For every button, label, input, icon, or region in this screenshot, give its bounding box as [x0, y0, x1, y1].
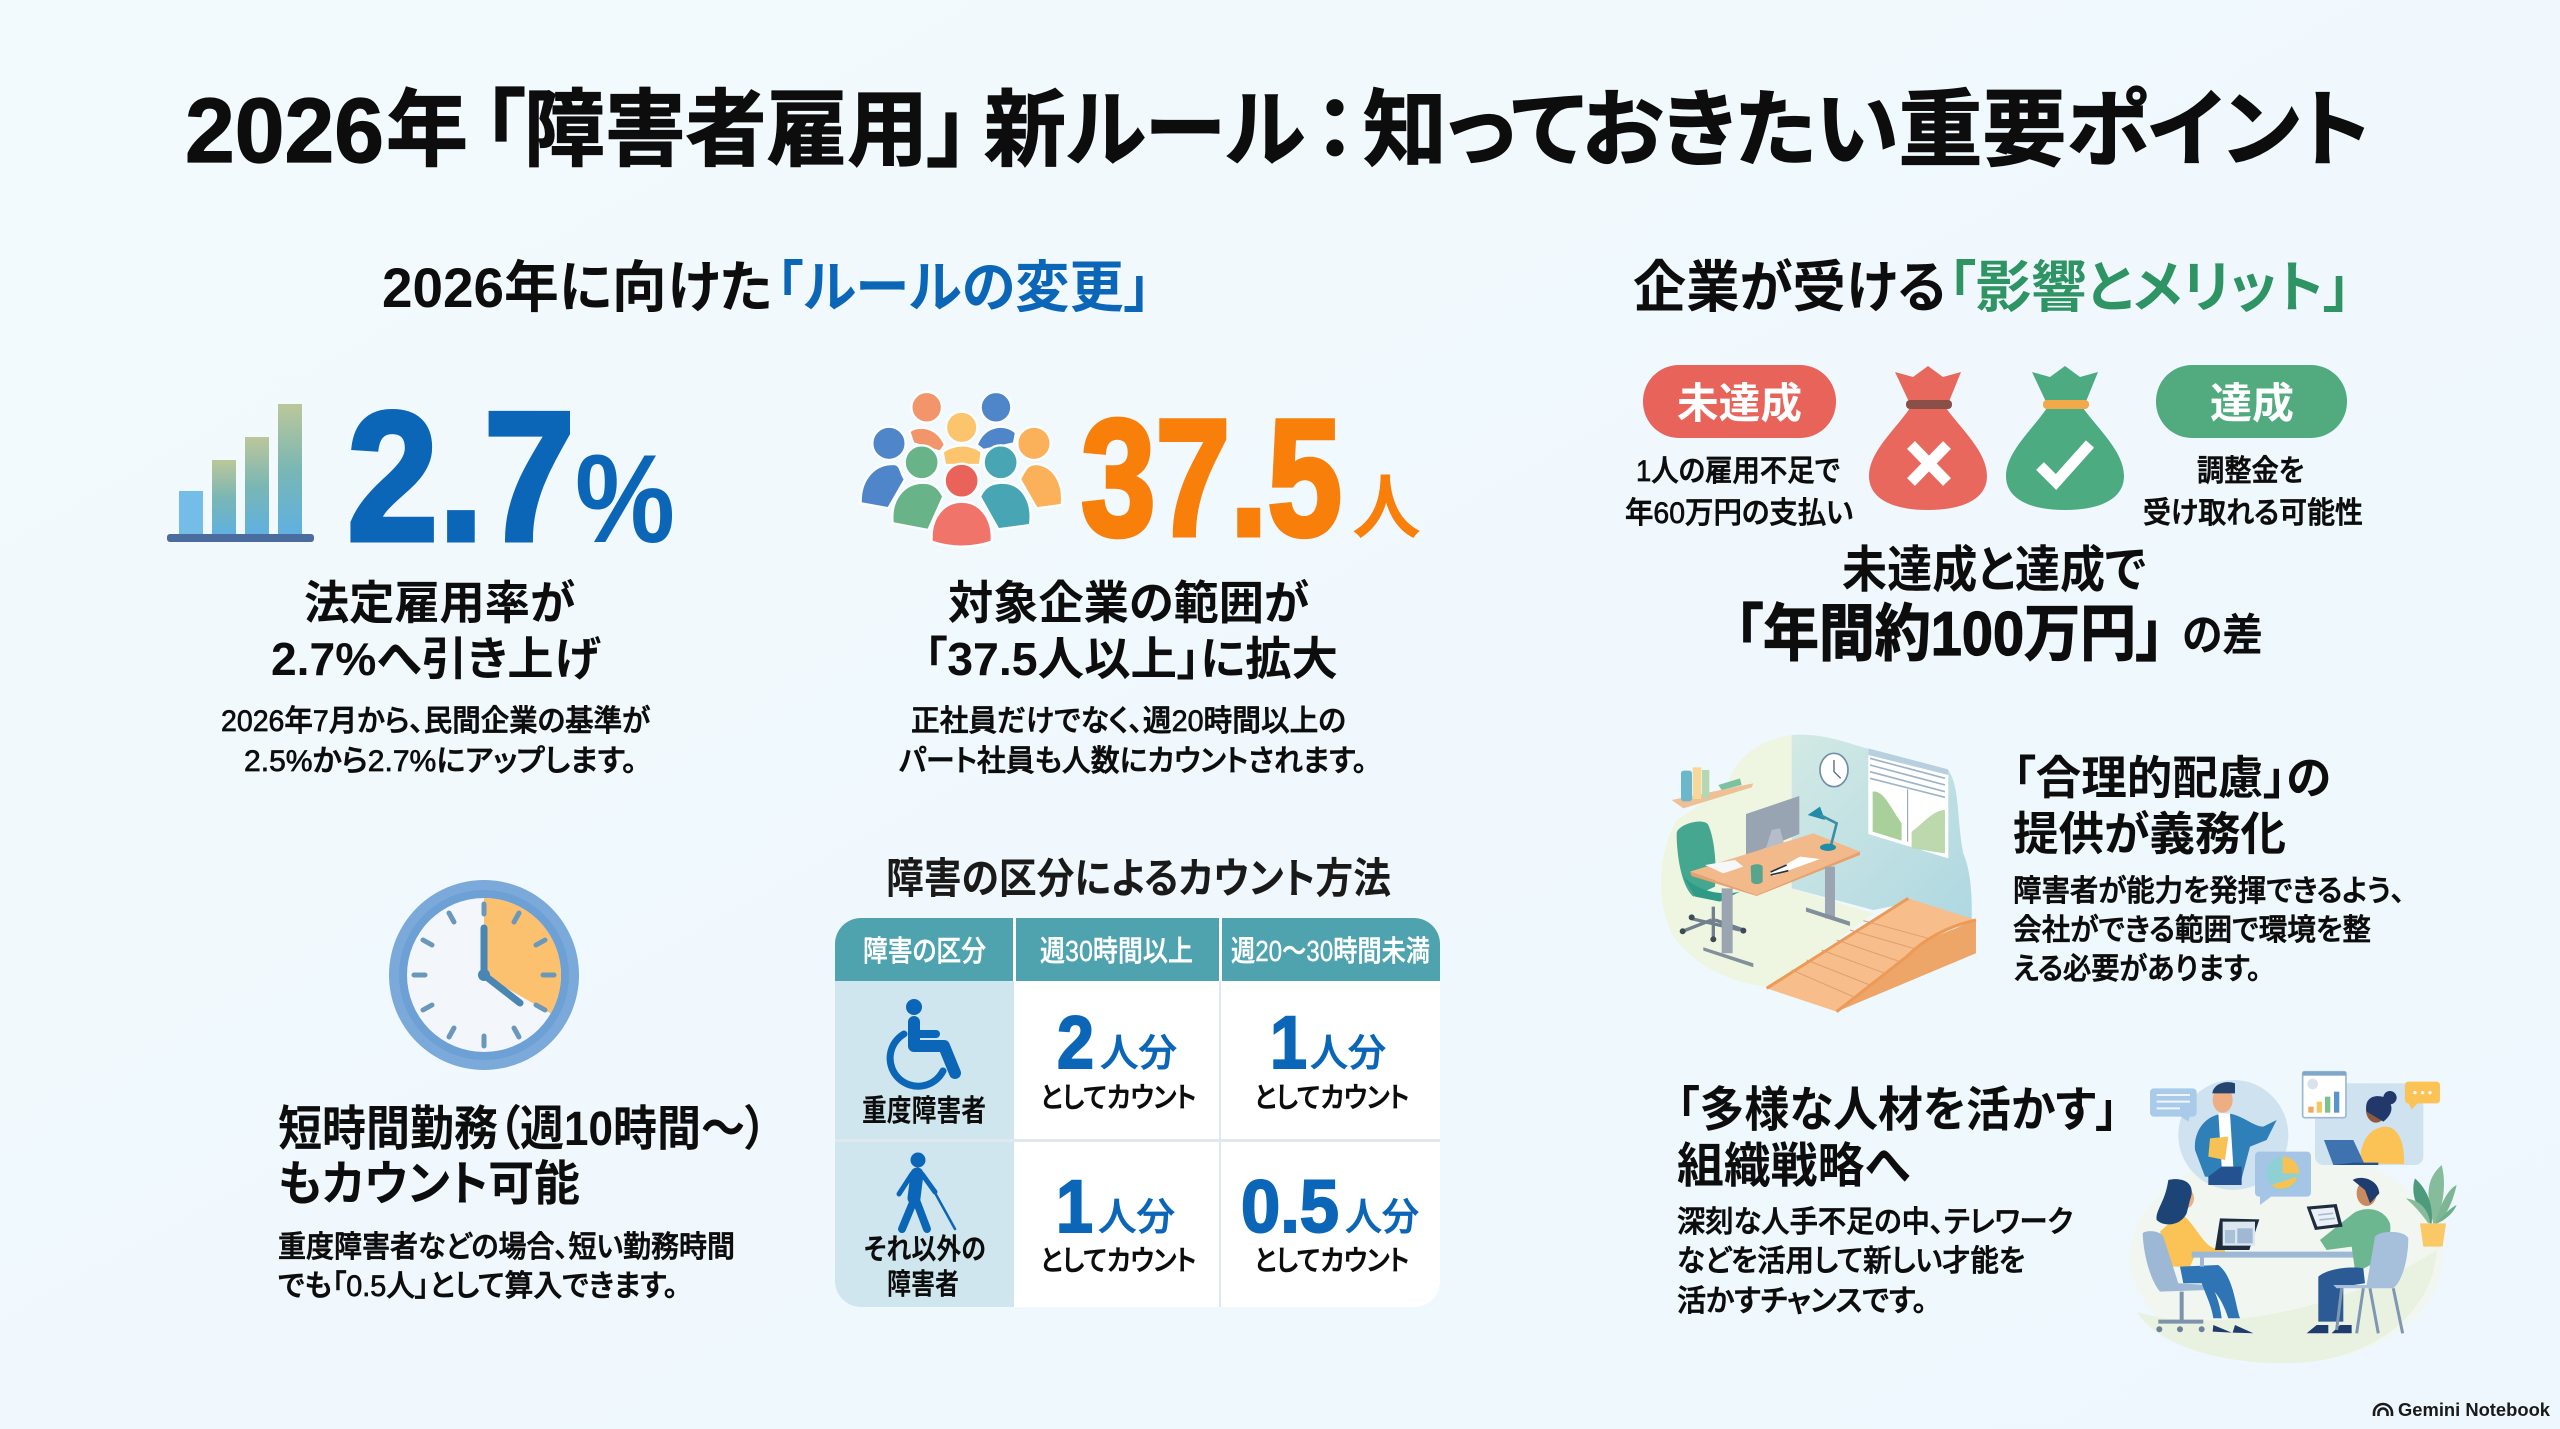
text block: company scope: 対象企業の範囲が [948, 577, 1309, 629]
stat: 37.5 people: 人 [1352, 469, 1421, 547]
stat: 2.7%: 2.7 [347, 373, 575, 579]
pill: not achieved: 未達成 [1677, 380, 1802, 427]
text block: company scope [899, 577, 1367, 778]
cell: severe, 20-30h: 1 [1270, 1001, 1307, 1084]
heading: rule changes: 2026年に向けた [382, 256, 772, 319]
text block: reasonable accommodation: 「合理的配慮」の [2013, 752, 2331, 804]
table header row [863, 935, 1430, 968]
icon: green money bag [2006, 366, 2124, 510]
text block: employment rate: 2.5%から2.7%にアップします。 [244, 745, 637, 778]
cell: severe, 30h+: 2 [1057, 1001, 1094, 1084]
table header row: 障害の区分 [863, 935, 986, 968]
title: 知っておきたい重要ポイント [1363, 83, 2370, 177]
cell: other, 20-30h: としてカウント [1254, 1245, 1409, 1276]
heading: impact and merit: 「影響とメリット」 [1948, 256, 2351, 319]
heading: rule changes [382, 256, 1151, 319]
text block: reasonable accommodation: 提供が義務化 [2013, 808, 2286, 860]
cell: severe, 20-30h: 人分 [1310, 1033, 1386, 1075]
illustration: diverse team meeting [2130, 1072, 2457, 1363]
text: achieved detail: 受け取れる可能性 [2143, 497, 2363, 530]
icon: clock [389, 880, 579, 1070]
title: 障害者雇用 [524, 83, 928, 177]
table header row: 週30時間以上 [1040, 935, 1193, 968]
cell: severe, 20-30h: としてカウント [1254, 1082, 1409, 1113]
text block: diverse talent strategy: 活かすチャンスです。 [1677, 1285, 1927, 1318]
icon: person with cane [899, 1152, 955, 1229]
text block: short-time work [278, 1103, 767, 1303]
text block: reasonable accommodation: 会社ができる範囲で環境を整 [2013, 914, 2371, 947]
cell: severe, 20-30h [1254, 1001, 1409, 1113]
cell: other, 20-30h: 人分 [1345, 1197, 1419, 1239]
pill: achieved: 達成 [2210, 380, 2294, 427]
cell: other, 30h+: 1 [1056, 1165, 1093, 1248]
cell: other, 30h+ [1040, 1165, 1196, 1276]
table header row: 週20〜30時間未満 [1231, 935, 1430, 968]
icon: rising bar chart [167, 404, 314, 542]
text: not achieved detail: 1人の雇用不足で [1636, 455, 1840, 488]
text block: diverse talent strategy: などを活用して新しい才能を [1677, 1245, 2025, 1278]
label: other disabilities: それ以外の [864, 1233, 986, 1266]
text block: company scope: 「37.5人以上」に拡大 [924, 633, 1338, 685]
cell: other, 20-30h: 0.5 [1241, 1165, 1339, 1248]
text: not achieved detail: 年60万円の支払い [1625, 497, 1853, 530]
cell: other, 30h+: 人分 [1098, 1197, 1175, 1239]
table heading: 障害の区分によるカウント方法 [886, 855, 1391, 902]
stat: 2.7%: % [575, 430, 675, 569]
stat: 37.5 people: 37.5 [1081, 386, 1342, 571]
title: ： [1314, 83, 1356, 177]
heading: impact and merit [1633, 256, 2351, 319]
text block: short-time work: でも「0.5人」として算入できます。 [278, 1270, 678, 1303]
text: achieved detail: 調整金を [2197, 455, 2304, 488]
cell: severe, 30h+: としてカウント [1040, 1082, 1196, 1113]
title: 新ルール [984, 83, 1305, 177]
text block: employment rate [221, 577, 651, 778]
text block: reasonable accommodation: 障害者が能力を発揮できるよう、 [2013, 875, 2405, 908]
text block: diverse talent strategy [1677, 1084, 2118, 1318]
icon: red money bag [1869, 366, 1987, 510]
text block: short-time work: 短時間勤務（週10時間〜） [278, 1103, 767, 1156]
text block: employment rate: 法定雇用率が [304, 577, 575, 629]
footer: Gemini Notebook logo: Gemini Notebook [2398, 1400, 2551, 1420]
text block: employment rate: 2.7%へ引き上げ [271, 633, 601, 685]
heading: impact and merit: 企業が受ける [1633, 256, 1946, 319]
callout: annual difference: の差 [2182, 611, 2263, 660]
callout: annual difference: 未達成と達成で [1842, 542, 2146, 598]
table: counting method [835, 918, 1440, 1307]
title: 2026 [185, 80, 384, 182]
title: 年 [386, 83, 468, 177]
text block: reasonable accommodation: える必要があります。 [2013, 953, 2261, 986]
text block: company scope: パート社員も人数にカウントされます。 [899, 745, 1367, 778]
text: achieved detail [2143, 455, 2363, 530]
cell: severe, 30h+: 人分 [1100, 1033, 1177, 1075]
text block: employment rate: 2026年7月から、民間企業の基準が [221, 705, 651, 738]
icon: wheelchair [890, 999, 955, 1086]
icon: group of people [861, 392, 1062, 547]
pill: not achieved [1643, 365, 1836, 438]
callout: annual difference [1735, 542, 2263, 669]
label: severe disability: 重度障害者 [862, 1095, 986, 1128]
panel: impact and merit [1625, 256, 2457, 1363]
text: not achieved detail [1625, 455, 1853, 530]
text block: diverse talent strategy: 組織戦略へ [1677, 1140, 1910, 1193]
illustration: accessible office [1661, 735, 1976, 1012]
text block: reasonable accommodation [2013, 752, 2405, 986]
cell: other, 30h+: としてカウント [1040, 1245, 1196, 1276]
label: other disabilities [864, 1233, 986, 1301]
panel: rule changes [167, 256, 1440, 1307]
pill: achieved [2156, 365, 2347, 438]
text block: short-time work: もカウント可能 [278, 1158, 580, 1211]
text block: short-time work: 重度障害者などの場合、短い勤務時間 [278, 1231, 735, 1264]
heading: rule changes: 「ルールの変更」 [776, 256, 1151, 319]
text block: company scope: 正社員だけでなく、週20時間以上の [911, 705, 1346, 738]
callout: annual difference: 「年間約100万円」 [1735, 600, 2164, 669]
title: 」 [927, 83, 969, 177]
text block: diverse talent strategy: 深刻な人手不足の中、テレワーク [1677, 1206, 2073, 1239]
title [185, 80, 2370, 182]
title: 「 [483, 83, 525, 177]
cell: other, 20-30h [1241, 1165, 1419, 1276]
label: other disabilities: 障害者 [887, 1268, 959, 1301]
cell: severe, 30h+ [1040, 1001, 1196, 1113]
text block: diverse talent strategy: 「多様な人材を活かす」 [1677, 1084, 2118, 1137]
